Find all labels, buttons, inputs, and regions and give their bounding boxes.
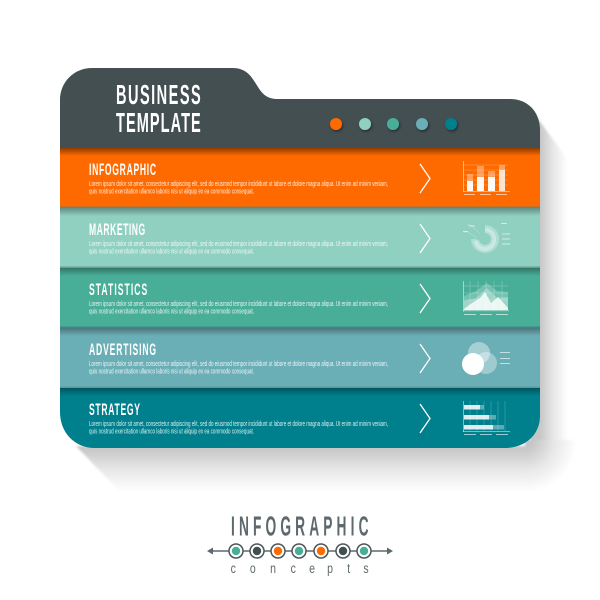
text block: strategy	[89, 400, 388, 436]
text block: statistics	[89, 280, 388, 316]
text block: strategy: quis nostrud exercitation ullamco laboris nisi ut aliquip ex ea commodo consequat.	[89, 426, 254, 436]
text block: advertising: ADVERTISING	[89, 340, 156, 359]
title: BUSINESS	[116, 79, 201, 110]
text block: statistics: quis nostrud exercitation ullamco laboris nisi ut aliquip ex ea commodo consequat.	[89, 306, 254, 316]
text block: statistics: STATISTICS	[89, 280, 147, 299]
text block: marketing: quis nostrud exercitation ullamco laboris nisi ut aliquip ex ea commodo consequat.	[89, 246, 254, 256]
footer subtitle: concepts	[231, 561, 369, 576]
arrow: infographic	[420, 164, 430, 193]
folder long shadow	[76, 108, 580, 495]
bar chart icon	[463, 161, 510, 195]
text block: infographic: quis nostrud exercitation ullamco laboris nisi ut aliquip ex ea commodo consequat.	[89, 186, 254, 196]
text block: strategy: Lorem ipsum dolor sit amet, consectetur adipiscing elit, sed do eiusmod tempor incididunt ut labore et dolore magna aliqua. Ut enim ad minim veniam,	[89, 419, 388, 428]
text block: infographic: Lorem ipsum dolor sit amet, consectetur adipiscing elit, sed do eiusmod tempor incididunt ut labore et dolore magna aliqua. Ut enim ad minim veniam,	[89, 179, 388, 188]
band: infographic background	[60, 148, 540, 208]
text block: statistics: Lorem ipsum dolor sit amet, consectetur adipiscing elit, sed do eiusmod tempor incididunt ut labore et dolore magna aliqua. Ut enim ad minim veniam,	[89, 299, 388, 308]
text block: infographic: INFOGRAPHIC	[89, 160, 156, 179]
band: strategy background	[60, 388, 540, 448]
folder body	[60, 68, 540, 448]
title: TEMPLATE	[116, 107, 201, 138]
band: statistics background	[60, 268, 540, 328]
folder header	[60, 68, 540, 148]
footer heading: INFOGRAPHIC	[231, 510, 369, 542]
navigation dots	[330, 118, 457, 130]
arrow: statistics	[420, 284, 430, 313]
band: marketing background	[60, 208, 540, 268]
arrow: strategy	[420, 404, 430, 433]
text block: marketing: Lorem ipsum dolor sit amet, consectetur adipiscing elit, sed do eiusmod tempor incididunt ut labore et dolore magna aliqua. Ut enim ad minim veniam,	[89, 239, 388, 248]
donut chart icon	[463, 223, 510, 253]
text block: advertising: quis nostrud exercitation ullamco laboris nisi ut aliquip ex ea commodo consequat.	[89, 366, 254, 376]
arrow: marketing	[420, 224, 430, 253]
text block: advertising	[89, 340, 388, 376]
title	[116, 79, 201, 138]
text block: infographic	[89, 160, 388, 196]
horizontal bar chart icon	[463, 401, 510, 435]
text block: marketing	[89, 220, 388, 256]
text block: marketing: MARKETING	[89, 220, 145, 239]
footer logo	[207, 510, 393, 576]
band: advertising background	[60, 328, 540, 388]
area chart icon	[463, 281, 509, 315]
arrow: advertising	[420, 344, 430, 373]
text block: strategy: STRATEGY	[89, 400, 140, 419]
venn diagram icon	[462, 342, 510, 375]
timeline with arrows and dots	[207, 544, 393, 558]
text block: advertising: Lorem ipsum dolor sit amet, consectetur adipiscing elit, sed do eiusmod tempor incididunt ut labore et dolore magna aliqua. Ut enim ad minim veniam,	[89, 359, 388, 368]
